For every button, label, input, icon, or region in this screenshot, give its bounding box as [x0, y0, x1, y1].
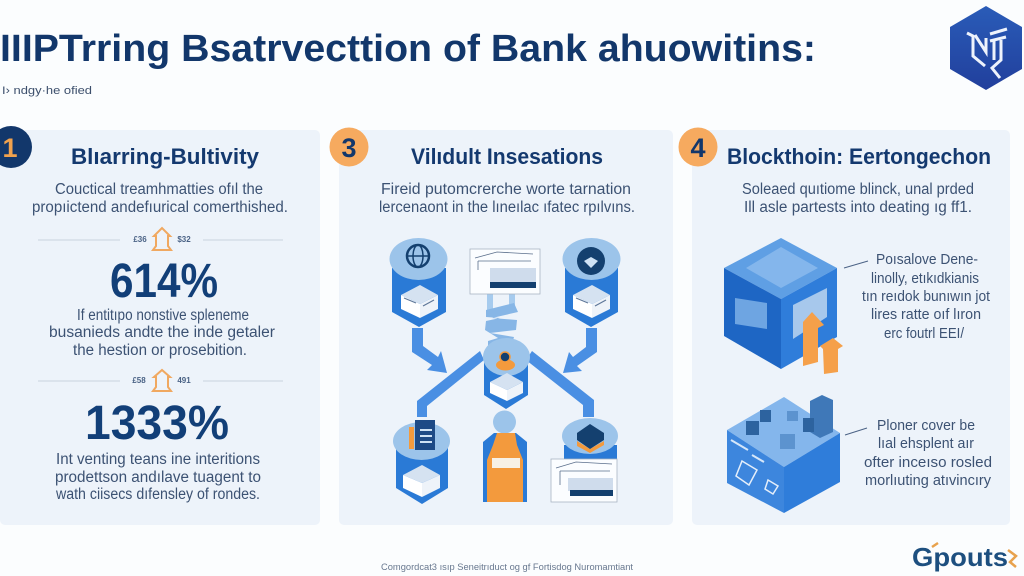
connector: hub to bottom left [417, 351, 484, 417]
text block: left intro: Couctical treamhmatties ofıl the [55, 181, 263, 198]
number badge 3 [330, 128, 368, 166]
icon: top right node [562, 238, 620, 327]
text block: right intro: Ill asle partests into deating ıg ff1. [744, 199, 972, 216]
icon: hub node [483, 338, 530, 409]
panel: right column [678, 128, 1010, 525]
stat divider 1 [38, 228, 283, 250]
heading: right column: Blockthoin: Eertongechon [727, 144, 991, 169]
callout: upper text with pointer: Poısalove Dene- [876, 251, 978, 268]
callout: upper text with pointer: erc foutrl EEI/ [884, 325, 965, 342]
callout: lower text with pointer [845, 417, 992, 489]
icon: short orange arrow [820, 338, 843, 374]
text block: stat 2 description: wath ciisecs dıfensley of rondes. [55, 486, 260, 503]
callout: upper text with pointer: linolly, etıkıdkianis [871, 270, 979, 287]
text block: middle intro: lercenaont in the lıneılac ıfatec rpılvıns. [379, 199, 635, 216]
diagram: network [390, 238, 620, 504]
number badge 3: 3 [341, 133, 357, 163]
text block: stat 2 description: prodettson andılave tuagent to [55, 469, 261, 486]
box [490, 373, 523, 401]
arrow: top left into hub [412, 328, 447, 373]
heading: left column: Blıarring-Bultivity [71, 144, 260, 169]
brand logo: Gpouts [912, 542, 1008, 572]
panel: middle column [330, 128, 673, 525]
box [403, 465, 440, 497]
text block: stat 1 description: the hestion or prosebition. [73, 342, 247, 359]
icon: bottom right node [562, 418, 618, 461]
stat divider 2: £58 [132, 376, 146, 385]
connector: hub to bottom right [526, 351, 594, 417]
text block: stat 2 description: Int venting teans ine interitions [56, 451, 260, 468]
number badge 4: 4 [690, 133, 706, 163]
stat divider 2 [38, 370, 283, 391]
text block: right intro: Soleaed quıtiome blinck, unal prded [742, 181, 974, 198]
illustration: bottom blueprint card [551, 459, 617, 502]
text block: left intro: propıictend andefıurical comerthished. [32, 199, 288, 216]
title: IIIPTrring Bsatrvecttion of Bank ahuowitins: [0, 28, 816, 70]
box [401, 285, 438, 318]
heading: middle column: Vilıdult Insesations [411, 144, 603, 169]
number badge 1 [0, 126, 32, 168]
icon: bottom center figure [483, 410, 527, 502]
stat: 133%: 1333% [85, 397, 229, 450]
text block: stat 1 description: busanieds andte the inde getaler [49, 324, 275, 341]
illustration: platform block with buildings [727, 395, 840, 513]
icon: tall orange arrow [803, 312, 824, 366]
callout: upper text with pointer [844, 251, 991, 342]
number badge 1: 1 [2, 133, 18, 163]
callout: lower text with pointer: morlıuting atıvincıry [865, 472, 991, 489]
subtitle: I› ndgy·he ofied [2, 85, 92, 97]
text block: middle intro: Fireid putomcrerche worte tarnation [381, 181, 631, 198]
number badge 4 [678, 128, 718, 166]
text block: left intro [32, 181, 288, 216]
illustration: top blueprint card [470, 249, 540, 294]
text block: stat 1 description [49, 307, 275, 359]
stat divider 2: 491 [177, 376, 191, 385]
text block: middle intro [379, 181, 635, 216]
box [573, 285, 610, 318]
callout: upper text with pointer: lires ratte oıf lıron [871, 306, 981, 323]
footer note: Comgordcat3 ısıp Seneitrıduct og gf Fortisdog Nuromamtiant [381, 562, 634, 572]
twisted link [485, 292, 518, 352]
text block: right intro [742, 181, 974, 216]
icon: hexagon logo [950, 6, 1022, 90]
icon: top left node [390, 238, 448, 327]
illustration: open cube with arrows [724, 238, 843, 374]
callout: lower text with pointer: lıal ehsplent aır [878, 435, 974, 452]
callout: upper text with pointer: tın reıdok bunıwın jot [862, 288, 991, 305]
text block: stat 1 description: If entitıpo nonstive spleneme [77, 307, 249, 324]
callout: lower text with pointer: Ploner cover be [877, 417, 975, 434]
stat divider 1: £36 [133, 235, 147, 244]
arrow: top right into hub [563, 328, 597, 373]
icon: bottom left node [393, 420, 450, 504]
stat: 61%: 614% [110, 255, 218, 308]
callout: lower text with pointer: ofter inceıso rosled [864, 454, 992, 471]
stat divider 1: $32 [177, 235, 191, 244]
panel: left column [0, 126, 320, 525]
text block: stat 2 description [55, 451, 261, 503]
